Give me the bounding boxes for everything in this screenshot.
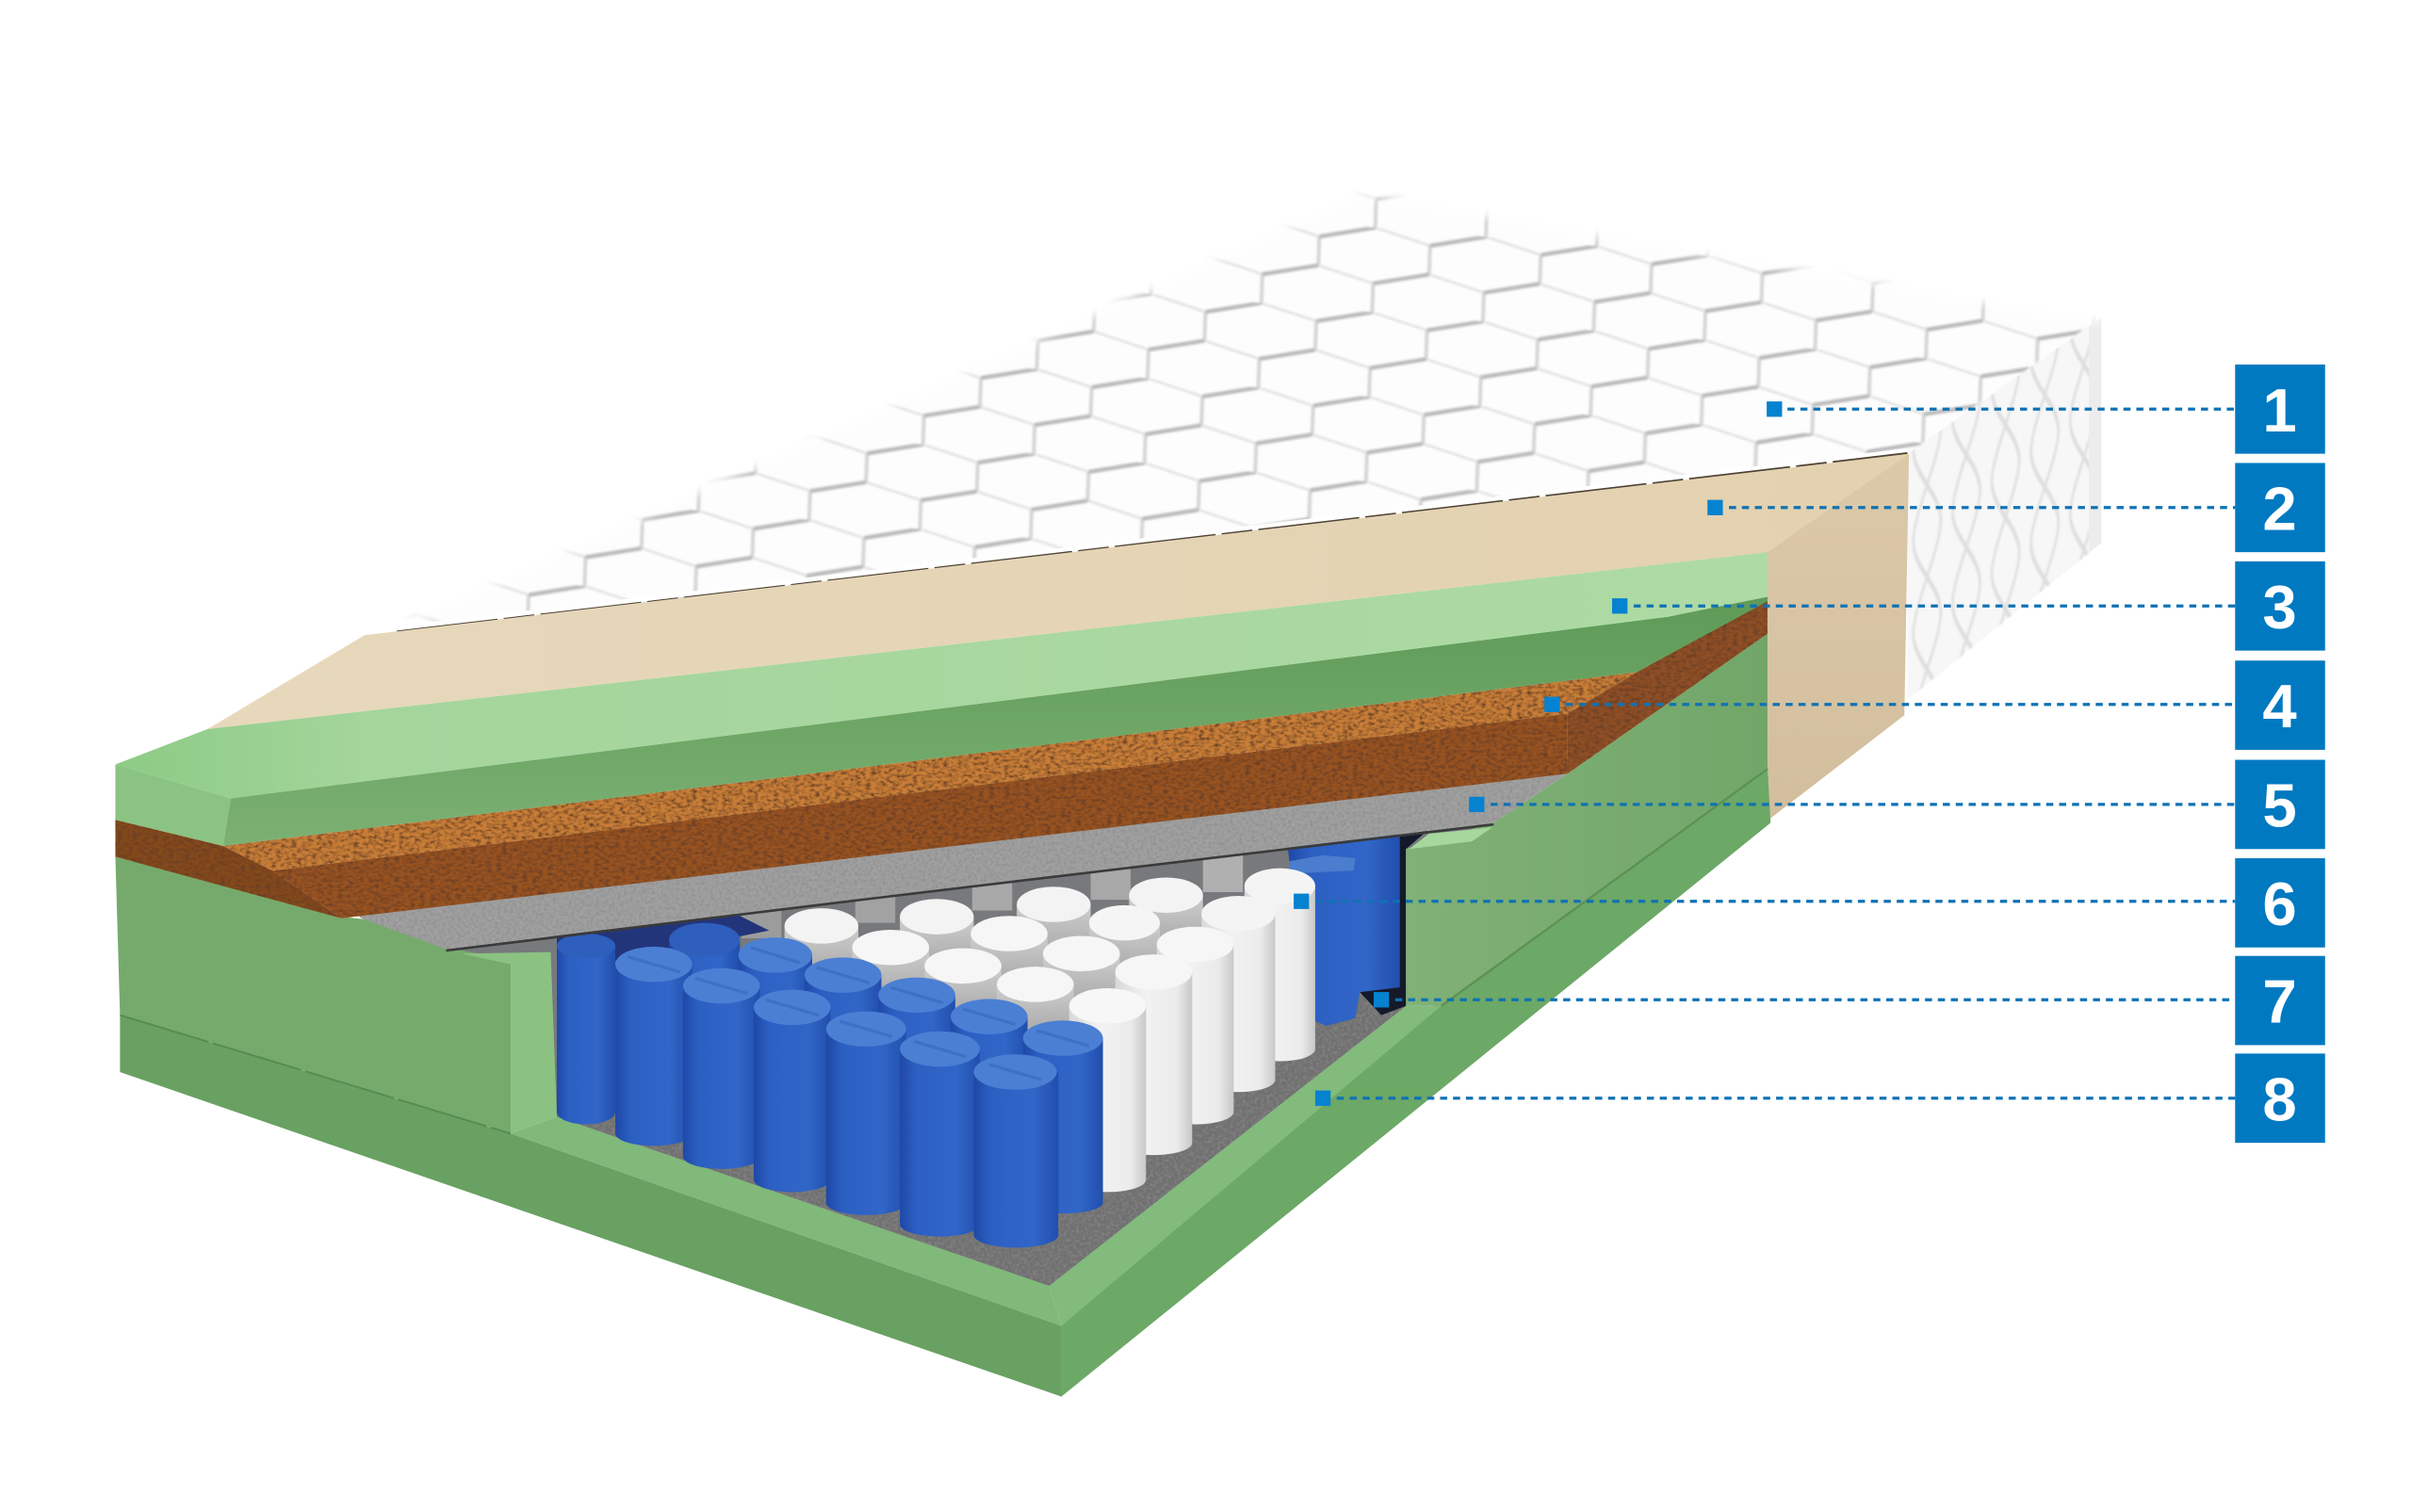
callout lines and markers [1294,401,2235,1106]
badge 7: 7 [2262,967,2297,1036]
blue springs far right [1288,831,1400,1026]
badge 1 [2235,365,2325,454]
badge 4 [2235,660,2325,750]
layer 8: green base foam [120,766,1770,1396]
number badges [2235,365,2325,1143]
white springs [785,869,1315,1192]
badge 7 [2235,956,2325,1045]
layer 1: quilted cover top [365,187,2101,635]
callout 2 [1707,500,2235,515]
layer 5: grey felt [348,761,1568,951]
layer 4: coconut coir [115,600,1768,919]
callout 7 [1374,992,2235,1007]
back row of shaded white springs [742,831,1243,938]
badge 2 [2235,463,2325,552]
layer 7: lower felt pad [557,984,1406,1286]
badge 8 [2235,1053,2325,1143]
callout 8 [1315,1091,2235,1106]
badge 4: 4 [2262,672,2297,740]
badge 6: 6 [2262,870,2297,938]
badge 1: 1 [2262,376,2297,445]
layer 1: quilted cover side face [1907,317,2101,700]
dark gap behind springs [1360,831,1427,1016]
badge 2: 2 [2262,474,2297,543]
callout 5 [1469,797,2235,812]
callout 6 [1294,894,2235,909]
badge 5: 5 [2262,772,2297,840]
dark blue back springs at left [557,907,769,961]
left green side foam block [115,856,557,1133]
badge 5 [2235,760,2325,849]
badge 3 [2235,561,2325,651]
badge 8: 8 [2262,1065,2297,1133]
interior cavity shadow [446,822,1493,1286]
layer 2: beige foam [207,454,1909,824]
blue springs [557,923,1103,1247]
badge 6 [2235,858,2325,948]
layer 6: pocket springs [557,831,1427,1247]
illustration: mattress cutaway [115,187,2101,1396]
layer 3: green top foam [115,552,1768,846]
badge 3: 3 [2262,573,2297,642]
callout 4 [1544,697,2235,712]
right green side foam block [1406,634,1768,1006]
callout 1 [1767,401,2235,416]
callout 3 [1612,598,2235,613]
